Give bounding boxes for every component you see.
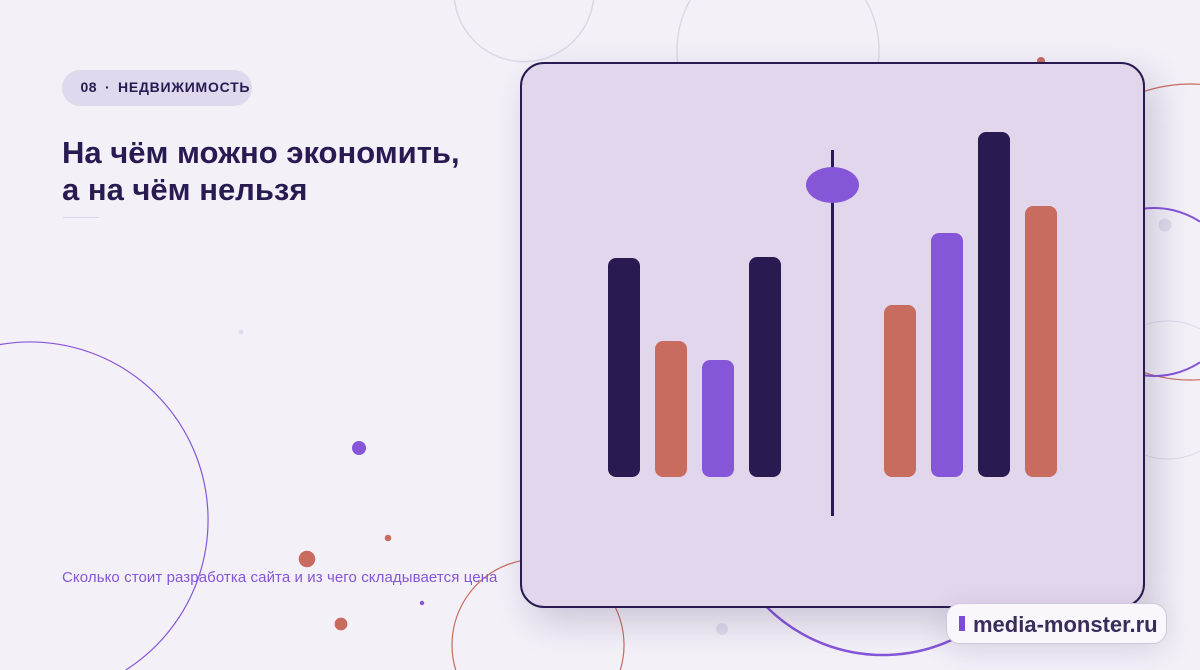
category name: НЕДВИЖИМОСТЬ (118, 79, 250, 95)
category pill (62, 70, 252, 106)
title: На чём можно экономить, (62, 134, 460, 170)
bar chart with divider (608, 132, 1057, 516)
category number: 08 (80, 79, 97, 95)
watermark text: media-monster.ru (973, 612, 1158, 637)
title: а на чём нельзя (62, 172, 307, 207)
watermark accent bar (959, 616, 965, 631)
title (62, 134, 460, 207)
panel: chart illustration (520, 62, 1145, 608)
watermark badge (946, 603, 1167, 644)
subtitle: Сколько стоит разработка сайта и из чего складывается цена (62, 569, 497, 586)
category separator: · (105, 79, 110, 95)
